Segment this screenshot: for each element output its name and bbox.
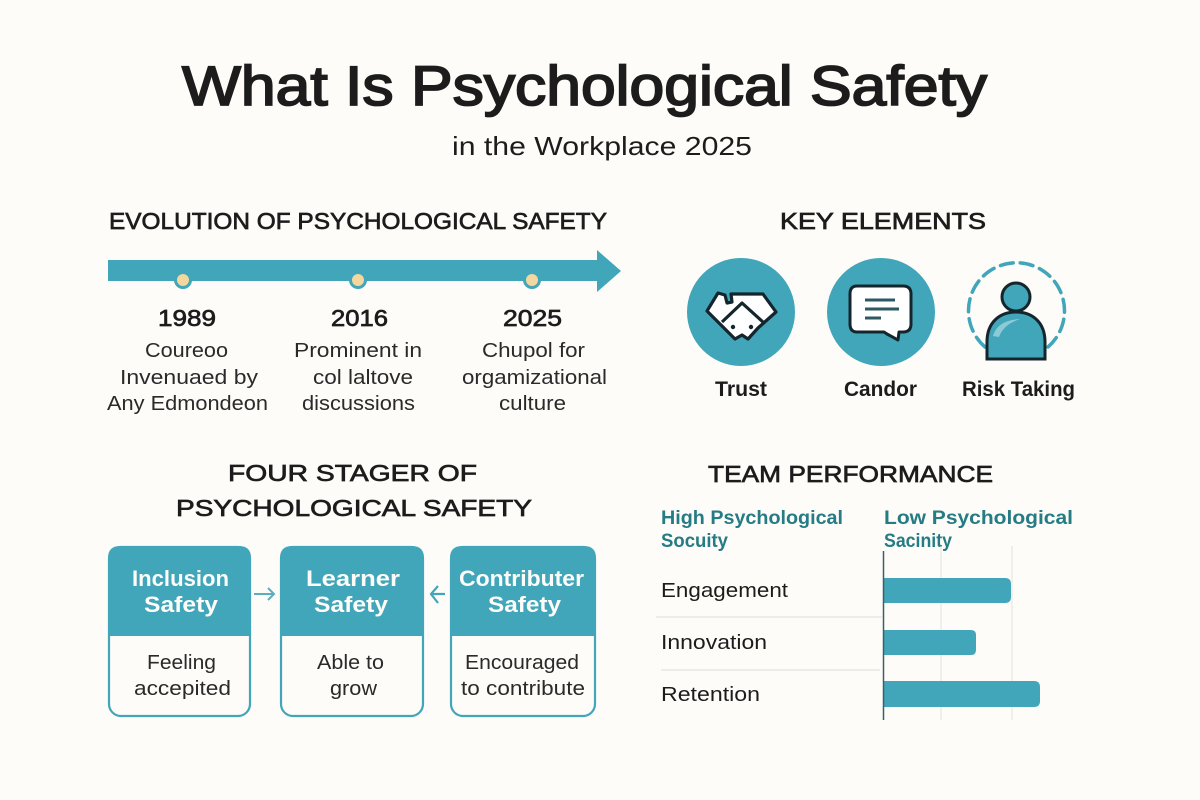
column header: high — [661, 508, 843, 552]
label: trust: Trust — [715, 378, 767, 401]
card: contributor safety — [450, 546, 596, 716]
panel: evolution timeline — [107, 208, 621, 415]
milestone 2025: orgamizational — [462, 367, 607, 389]
milestone 2025 — [462, 305, 607, 415]
column header: high: Socuity — [661, 531, 728, 552]
card: contributor safety: Contributer — [459, 566, 584, 591]
milestone 2016: col laltove — [313, 367, 413, 389]
heading: key elements: KEY ELEMENTS — [780, 208, 986, 234]
card: learner safety: grow — [330, 678, 378, 700]
heading: four stages: FOUR STAGER OF — [228, 460, 477, 486]
milestone 2016: discussions — [302, 393, 415, 415]
heading: team performance: TEAM PERFORMANCE — [708, 461, 993, 487]
row: retention — [661, 681, 1040, 707]
row: innovation: Innovation — [661, 632, 767, 654]
column header: high: High Psychological — [661, 508, 843, 529]
card: contributor safety: Safety — [488, 592, 562, 617]
heading: evolution: EVOLUTION OF PSYCHOLOGICAL SAFETY — [109, 208, 607, 234]
marker 2025 — [523, 271, 541, 289]
card: inclusion safety: accepited — [134, 678, 231, 700]
milestone 1989: Coureoo — [145, 340, 228, 362]
milestone 1989: Any Edmondeon — [107, 393, 268, 415]
card: inclusion safety: Feeling — [147, 652, 216, 674]
chart axis — [882, 551, 884, 720]
card: learner safety — [280, 546, 424, 716]
arrow: inclusion to learner — [254, 588, 274, 600]
card: contributor safety: Encouraged — [465, 652, 579, 674]
column header: low: Low Psychological — [884, 508, 1073, 529]
label: candor: Candor — [844, 378, 917, 401]
milestone 1989: 1989 — [158, 305, 216, 331]
milestone 1989 — [107, 305, 268, 415]
column header: low: Sacinity — [884, 531, 952, 552]
panel: four stages — [108, 460, 596, 716]
milestone 2016: 2016 — [331, 305, 388, 331]
icon: risk taking person — [969, 263, 1064, 359]
timeline arrow — [108, 250, 621, 292]
row: engagement: Engagement — [661, 580, 788, 602]
card: inclusion safety: Inclusion — [132, 566, 229, 591]
row: innovation — [661, 630, 976, 655]
label: risk taking: Risk Taking — [962, 378, 1075, 401]
subtitle: in the Workplace 2025 — [452, 131, 752, 161]
title: What Is Psychological Safety — [182, 54, 987, 117]
milestone 2025: culture — [499, 393, 566, 415]
card: learner safety: Able to — [317, 652, 384, 674]
row: retention: Retention — [661, 684, 760, 706]
milestone 2016: Prominent in — [294, 340, 422, 362]
heading: four stages — [176, 460, 532, 521]
row: engagement — [661, 578, 1011, 603]
milestone 2016 — [294, 305, 422, 415]
card: learner safety: Learner — [306, 566, 400, 591]
card: inclusion safety — [108, 546, 251, 716]
milestone 1989: Invenuaed by — [120, 367, 258, 389]
milestone 2025: Chupol for — [482, 340, 585, 362]
card: learner safety: Safety — [314, 592, 389, 617]
card: contributor safety: to contribute — [461, 678, 585, 700]
heading: four stages: PSYCHOLOGICAL SAFETY — [176, 495, 532, 521]
card: inclusion safety: Safety — [144, 592, 219, 617]
panel: team performance — [656, 461, 1073, 720]
milestone 2025: 2025 — [503, 305, 562, 331]
marker 1989 — [174, 271, 192, 289]
icon: trust handshake — [687, 258, 795, 366]
icon: candor speech bubble — [827, 258, 935, 366]
panel: key elements — [687, 208, 1075, 401]
marker 2016 — [349, 271, 367, 289]
arrow: contributor to learner — [431, 586, 445, 603]
column header: low — [884, 508, 1073, 552]
